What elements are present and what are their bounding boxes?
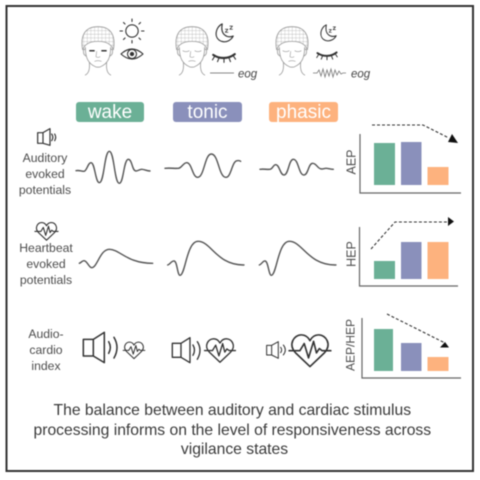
icon: eye	[121, 49, 143, 59]
trend arrow	[371, 217, 454, 249]
caption: processing informs on the level of responsiveness across	[34, 422, 431, 439]
bars	[374, 329, 448, 371]
label: Auditory evoked potentials: Auditory	[23, 151, 68, 165]
label: Audio-cardio index: Audio-	[28, 327, 64, 341]
state label: tonic: tonic	[187, 102, 228, 123]
wave: AEP wake	[76, 151, 150, 183]
wave: HEP tonic	[168, 241, 244, 275]
eog label: eog	[238, 68, 258, 80]
wave: AEP phasic	[260, 159, 333, 175]
icon: sun	[120, 19, 144, 43]
caption: vigilance states	[181, 441, 288, 458]
wave: HEP phasic	[259, 241, 336, 275]
axes	[362, 318, 461, 378]
icon: speaker small	[38, 129, 56, 145]
label: Audio-cardio index: cardio	[29, 343, 63, 357]
wavy eog trace	[313, 69, 346, 77]
icons: speaker small and heart large (phasic)	[267, 335, 331, 367]
flat eog trace	[210, 72, 234, 74]
icon: moon	[216, 24, 233, 42]
eog label: eog	[351, 68, 371, 80]
state label: phasic: phasic	[276, 102, 331, 123]
icon: head with EEG cap, eyes closed	[176, 27, 208, 75]
icon: head with EEG cap, eyes closed	[276, 27, 308, 75]
label: Heartbeat evoked potentials: Heartbeat	[19, 241, 73, 255]
head tonic with moon, lashes and flat eog	[176, 24, 258, 81]
axis label: AEP/HEP	[344, 319, 358, 371]
axes	[360, 134, 461, 193]
caption: The balance between auditory and cardiac stimulus	[54, 402, 411, 419]
bar chart: AEP/HEP	[344, 314, 461, 378]
trend arrow	[387, 314, 449, 348]
trend arrow	[372, 125, 458, 143]
label: Audio-cardio index: index	[31, 359, 61, 373]
icon: heart small with heartbeat	[35, 223, 58, 240]
head phasic with moon, lashes and wavy eog	[276, 25, 371, 80]
state label: wake: wake	[87, 102, 132, 123]
axis label: AEP	[344, 149, 358, 175]
icon: closed eye lashes	[317, 52, 337, 60]
bars	[374, 242, 448, 279]
AEP waves	[76, 151, 333, 183]
head wake with sun and eye	[82, 19, 144, 75]
icon: closed eye lashes	[212, 54, 236, 62]
label: Auditory evoked potentials: potentials	[19, 183, 71, 197]
axes	[360, 227, 458, 286]
HEP waves	[79, 241, 336, 275]
wave: AEP tonic	[165, 154, 241, 177]
icon: moon	[321, 25, 336, 41]
bars	[374, 142, 448, 185]
icons: speaker large and heart small (wake)	[83, 332, 145, 363]
bar chart: AEP	[344, 125, 461, 193]
bar chart: HEP	[344, 217, 458, 286]
label: Auditory evoked potentials: evoked	[25, 167, 65, 181]
label: Heartbeat evoked potentials: evoked	[26, 257, 66, 271]
icon: head with EEG cap, eyes open	[82, 27, 114, 75]
state label: tonic	[173, 102, 242, 123]
state label: wake	[76, 102, 144, 123]
icons: speaker medium and heart medium (tonic)	[172, 338, 235, 363]
label: Heartbeat evoked potentials: potentials	[20, 273, 72, 287]
wave: HEP wake	[79, 249, 153, 268]
axis label: HEP	[344, 241, 358, 267]
